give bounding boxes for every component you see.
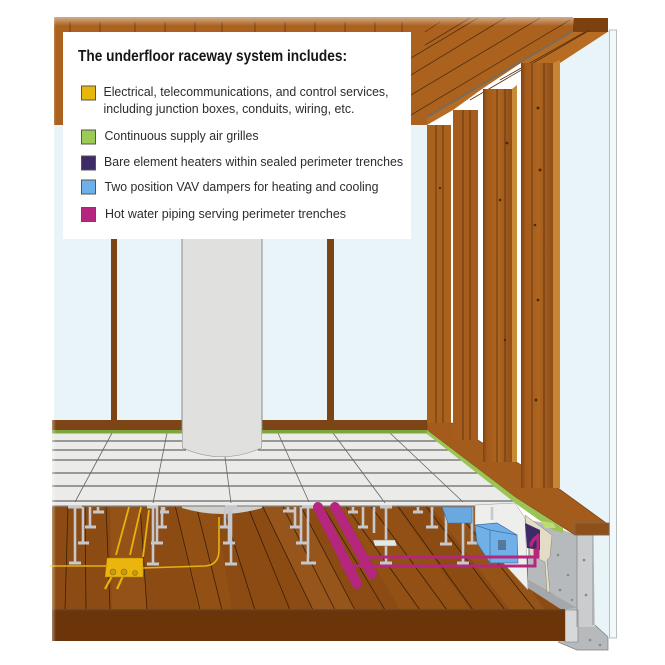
yellow junction box and conduit xyxy=(50,507,219,589)
legend item: electrical xyxy=(82,84,388,116)
beige perimeter panel xyxy=(525,515,552,592)
white trench wall xyxy=(475,503,528,590)
concrete trench and galvanized edge xyxy=(528,520,608,650)
magenta hot water piping xyxy=(318,507,538,584)
column xyxy=(182,232,262,457)
legend item: heaters: Bare element heaters within sealed perimeter trenches xyxy=(104,154,403,169)
legend item: piping: Hot water piping serving perimeter trenches xyxy=(105,206,346,221)
white control valve xyxy=(373,540,397,546)
front floor beam xyxy=(52,609,565,641)
window backdrop xyxy=(54,30,616,638)
bare element heater xyxy=(525,523,540,550)
legend item: electrical: including junction boxes, conduits, wiring, etc. xyxy=(104,101,354,116)
raised floor panels xyxy=(52,433,515,506)
timber columns xyxy=(427,60,560,488)
wood ceiling xyxy=(54,10,609,125)
window mullions xyxy=(111,235,334,422)
side sill xyxy=(427,420,609,535)
pedestals xyxy=(68,507,492,564)
legend item: grilles: Continuous supply air grilles xyxy=(104,128,259,143)
legend item: electrical: Electrical, telecommunications, and control services, xyxy=(104,84,388,99)
column underside xyxy=(182,505,262,514)
legend panel xyxy=(63,32,411,239)
green supply air grilles xyxy=(52,430,563,533)
back sill xyxy=(52,420,428,430)
legend title: The underfloor raceway system includes: xyxy=(78,48,347,65)
legend item: dampers: Two position VAV dampers for heating and cooling xyxy=(104,179,378,194)
left edge fade xyxy=(46,14,56,644)
wood floor under raised panels xyxy=(52,505,565,610)
blue VAV dampers xyxy=(442,507,518,563)
